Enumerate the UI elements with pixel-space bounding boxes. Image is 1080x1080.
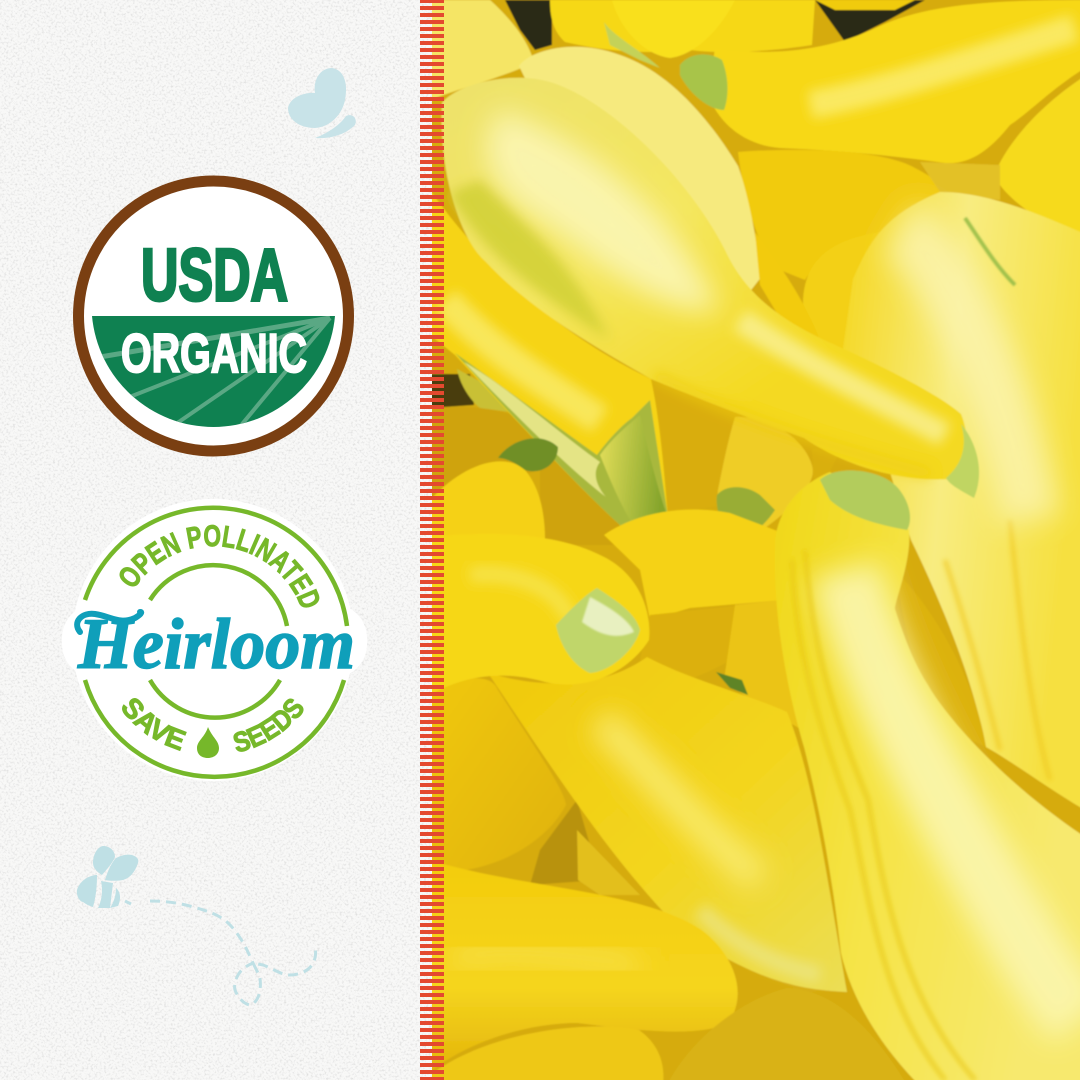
Heirloom script word: Heirloom: [77, 604, 355, 684]
squash: lower left gold: [430, 678, 566, 872]
icon: bee with dashed flight path: [77, 846, 316, 1005]
SEEDS text: SEEDS: [233, 698, 304, 752]
squash: left stub with stem: [430, 438, 558, 540]
fabric background panel: [0, 0, 432, 1080]
green tip: [946, 424, 979, 498]
squash: main large front top: [442, 78, 979, 498]
squash: lower-left with green underside: [430, 190, 668, 541]
squash: bottom row: [430, 1026, 663, 1080]
squash: small centre: [716, 416, 814, 528]
squash: hidden gold: [577, 830, 640, 895]
SAVE text: SAVE: [122, 698, 187, 752]
stem: [820, 471, 910, 530]
squash: right edge: [998, 78, 1080, 232]
squash: large front right: [775, 471, 1080, 1080]
squash: left front with cap: [430, 534, 748, 695]
squash: middle gold: [738, 150, 945, 280]
squash: back of right: [803, 192, 1080, 810]
stem: [680, 55, 728, 110]
squash: large lower centre: [488, 657, 847, 992]
squash: top left: [430, 0, 534, 100]
green rings: [85, 508, 347, 777]
green field: [92, 316, 335, 435]
USDA text: USDA: [141, 234, 288, 316]
squash: rear amber: [654, 382, 740, 487]
OPEN POLLINATED text: OPEN POLLINATED: [120, 524, 320, 608]
striped divider: [420, 0, 444, 1080]
squash: centre horizontal: [604, 509, 785, 620]
squash: top row: [550, 0, 915, 68]
icon: seed drop: [197, 727, 219, 758]
ORGANIC text: ORGANIC: [121, 322, 307, 384]
shadow gaps: [430, 0, 925, 885]
Heirloom badge: [62, 499, 367, 781]
squash: bottom left: [430, 860, 738, 1072]
USDA Organic seal: [78, 181, 348, 451]
icon: top butterfly: [288, 68, 356, 138]
photo: yellow crookneck squash pile: [425, 0, 1080, 1080]
squash: back pointed: [519, 45, 761, 290]
squash: top right: [680, 0, 1080, 163]
